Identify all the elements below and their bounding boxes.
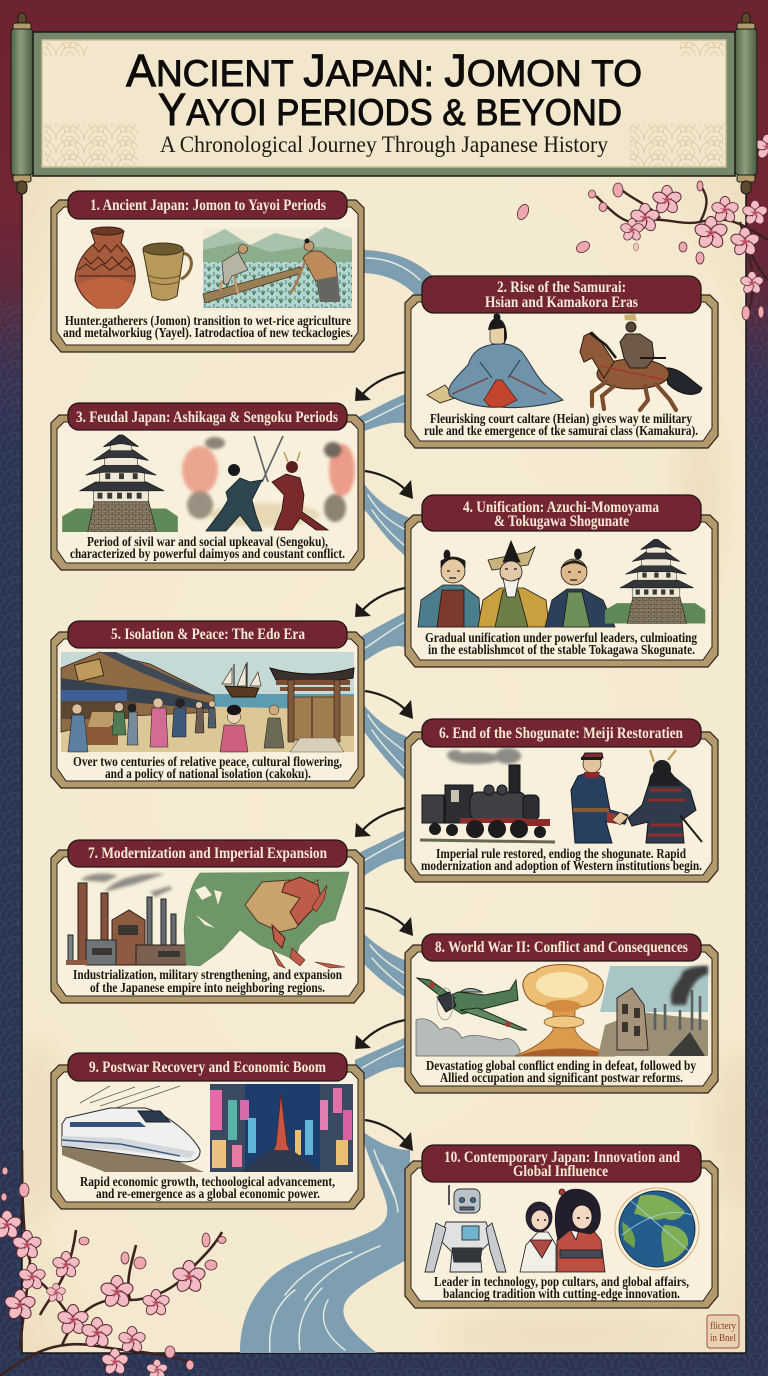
heading pill: [68, 621, 347, 648]
illustration: mushroom cloud: [515, 964, 615, 1056]
title: ANCIENT JAPAN: JOMON TO: [126, 45, 642, 96]
panel: card 9 Postwar Recovery: [51, 1053, 364, 1209]
illustration: shinkansen: [62, 1086, 204, 1172]
title scroll banner: [11, 13, 757, 194]
description: Allied occupation and significant postwar reforms.: [440, 1070, 683, 1085]
heading pill: [422, 495, 701, 531]
description: characterized by powerful daimyos and coustant conflict.: [70, 546, 345, 561]
townsfolk: [68, 698, 284, 752]
seal stamp: flictery: [710, 1321, 736, 1332]
description: [434, 1274, 689, 1301]
description: Industrialization, military strengthening, and expansion: [73, 967, 342, 982]
description: of the Japanese empire into neighboring regions.: [90, 980, 325, 995]
illustration: map of Asia: [184, 872, 349, 968]
seal stamp: in Bnel: [710, 1333, 736, 1344]
description: Fleurisking court caltare (Heian) gives way te military: [430, 411, 692, 427]
arrows between cards: [355, 372, 413, 1151]
torii gate: [270, 668, 354, 752]
description: [73, 754, 342, 782]
description: [424, 411, 698, 439]
title: [126, 45, 642, 135]
icon: Yayoi cup: [143, 243, 191, 300]
heading pill: 6. End of the Shogunate: Meiji Restoratien: [439, 725, 683, 742]
panel: card 2 Rise of the Samurai: [405, 276, 718, 448]
heading pill: 8. World War II: Conflict and Consequences: [435, 939, 688, 956]
cherry blossom branch: top right: [515, 134, 768, 320]
seal stamp: [707, 1315, 739, 1348]
illustration: three unifiers: [418, 541, 615, 627]
description: [73, 967, 342, 995]
description: Leader in technology, pop cultars, and global affairs,: [434, 1274, 689, 1289]
description: [426, 1058, 696, 1085]
illustration: Zero fighter plane: [417, 978, 527, 1030]
illustration: steam locomotive: [420, 748, 555, 842]
description: and a policy of national isolation (cakoku).: [105, 766, 311, 782]
panel: card 6 Meiji Restoration: [405, 719, 718, 882]
illustration: rice planting: [203, 227, 352, 310]
description: Gradual unification under powerful leaders, culmioating: [425, 630, 697, 645]
illustration: handshake of soldier and samurai: [571, 750, 702, 843]
description: Devastatiog global conflict ending in defeat, followed by: [426, 1058, 696, 1073]
description: Over two centuries of relative peace, cultural flowering,: [73, 754, 342, 769]
heading pill: 1. Ancient Japan: Jomon to Yayoi Periods: [90, 197, 326, 214]
description: and metalworkiug (Yayel). Iatrodactioa of new teckaclogies.: [63, 325, 353, 341]
panel: card 7 Modernization: [51, 840, 364, 1003]
description: rule and tke emergence of tke samurai class (Kamakura).: [424, 423, 698, 439]
heading pill: 5. Isolation & Peace: The Edo Era: [111, 626, 305, 643]
description: in the establishmcot of the stable Tokagawa Skogunate.: [428, 642, 695, 657]
heading pill: 9. Postwar Recovery and Economic Boom: [89, 1059, 326, 1076]
description: Rapid economic growth, techoological advancement,: [80, 1174, 335, 1189]
description: [70, 534, 345, 561]
description: modernization and adoption of Western institutions begin.: [421, 858, 702, 873]
heading pill: [422, 934, 701, 961]
panel: card 10 Contemporary Japan: [405, 1145, 718, 1308]
panel: card 8 World War II: [405, 934, 718, 1093]
icon: Jomon pot: [75, 227, 135, 308]
illustration: ruined city: [598, 966, 708, 1056]
heading pill: 7. Modernization and Imperial Expansion: [88, 845, 327, 862]
cherry blossom branch: bottom left: [0, 1150, 226, 1376]
heading pill: [68, 191, 347, 219]
heading pill: & Tokugawa Shogunate: [494, 513, 629, 530]
heading pill: Hsian and Kamakora Eras: [485, 294, 638, 311]
panel: card 1 Ancient Japan: [51, 191, 364, 352]
description: [421, 846, 702, 873]
river: [240, 250, 445, 1353]
illustration: samurai duel: [182, 436, 355, 531]
heading pill: [68, 1053, 347, 1081]
description: Hunter.gatherers (Jomon) transition to wet-rice agriculture: [65, 313, 351, 329]
heading pill: [422, 276, 701, 313]
illustration: Osaka castle: [605, 539, 705, 624]
illustration: neon Tokyo skyline: [210, 1084, 353, 1172]
description: [80, 1174, 335, 1201]
description: Imperial rule restored, endiog the shogunate. Rapid: [436, 846, 686, 861]
heading pill: 3. Feudal Japan: Ashikaga & Sengoku Periods: [76, 409, 338, 426]
subtitle: A Chronological Journey Through Japanese History: [160, 132, 608, 157]
description: [63, 313, 353, 341]
illustration: Heian noble: [427, 314, 563, 408]
heading pill: [68, 403, 347, 430]
heading pill: [68, 840, 347, 867]
panel: card 4 Unification: [405, 495, 718, 667]
illustration: castle: [62, 435, 178, 532]
heading pill: [422, 719, 701, 747]
illustration: anime girls: [520, 1189, 605, 1272]
panel: card 5 Edo Era: [51, 621, 364, 788]
description: and re-emergence as a global economic power.: [96, 1186, 320, 1201]
illustration: mounted samurai: [580, 314, 702, 410]
description: Period of sivil war and social upkeaval (Sengoku),: [87, 534, 328, 550]
ship: [222, 662, 261, 697]
heading pill: 4. Unification: Azuchi-Momoyama: [463, 499, 659, 516]
illustration: globe: [615, 1188, 699, 1270]
illustration: factory: [66, 874, 186, 965]
panel: card 3 Feudal Japan: [51, 403, 364, 570]
title: YAYOI PERIODS & BEYOND: [158, 84, 622, 135]
description: balanciog tradition with cutting-edge innovation.: [443, 1286, 680, 1301]
illustration: Edo street, ship and torii: [61, 652, 354, 752]
heading pill: Global Influence: [513, 1163, 608, 1180]
heading pill: 10. Contemporary Japan: Innovation and: [444, 1149, 680, 1166]
description: [425, 630, 697, 657]
heading pill: 2. Rise of the Samurai:: [497, 279, 626, 296]
illustration: robot: [425, 1185, 506, 1272]
illustration: clouds: [416, 1019, 520, 1056]
scroll rollers: [11, 13, 757, 194]
heading pill: [422, 1145, 701, 1182]
